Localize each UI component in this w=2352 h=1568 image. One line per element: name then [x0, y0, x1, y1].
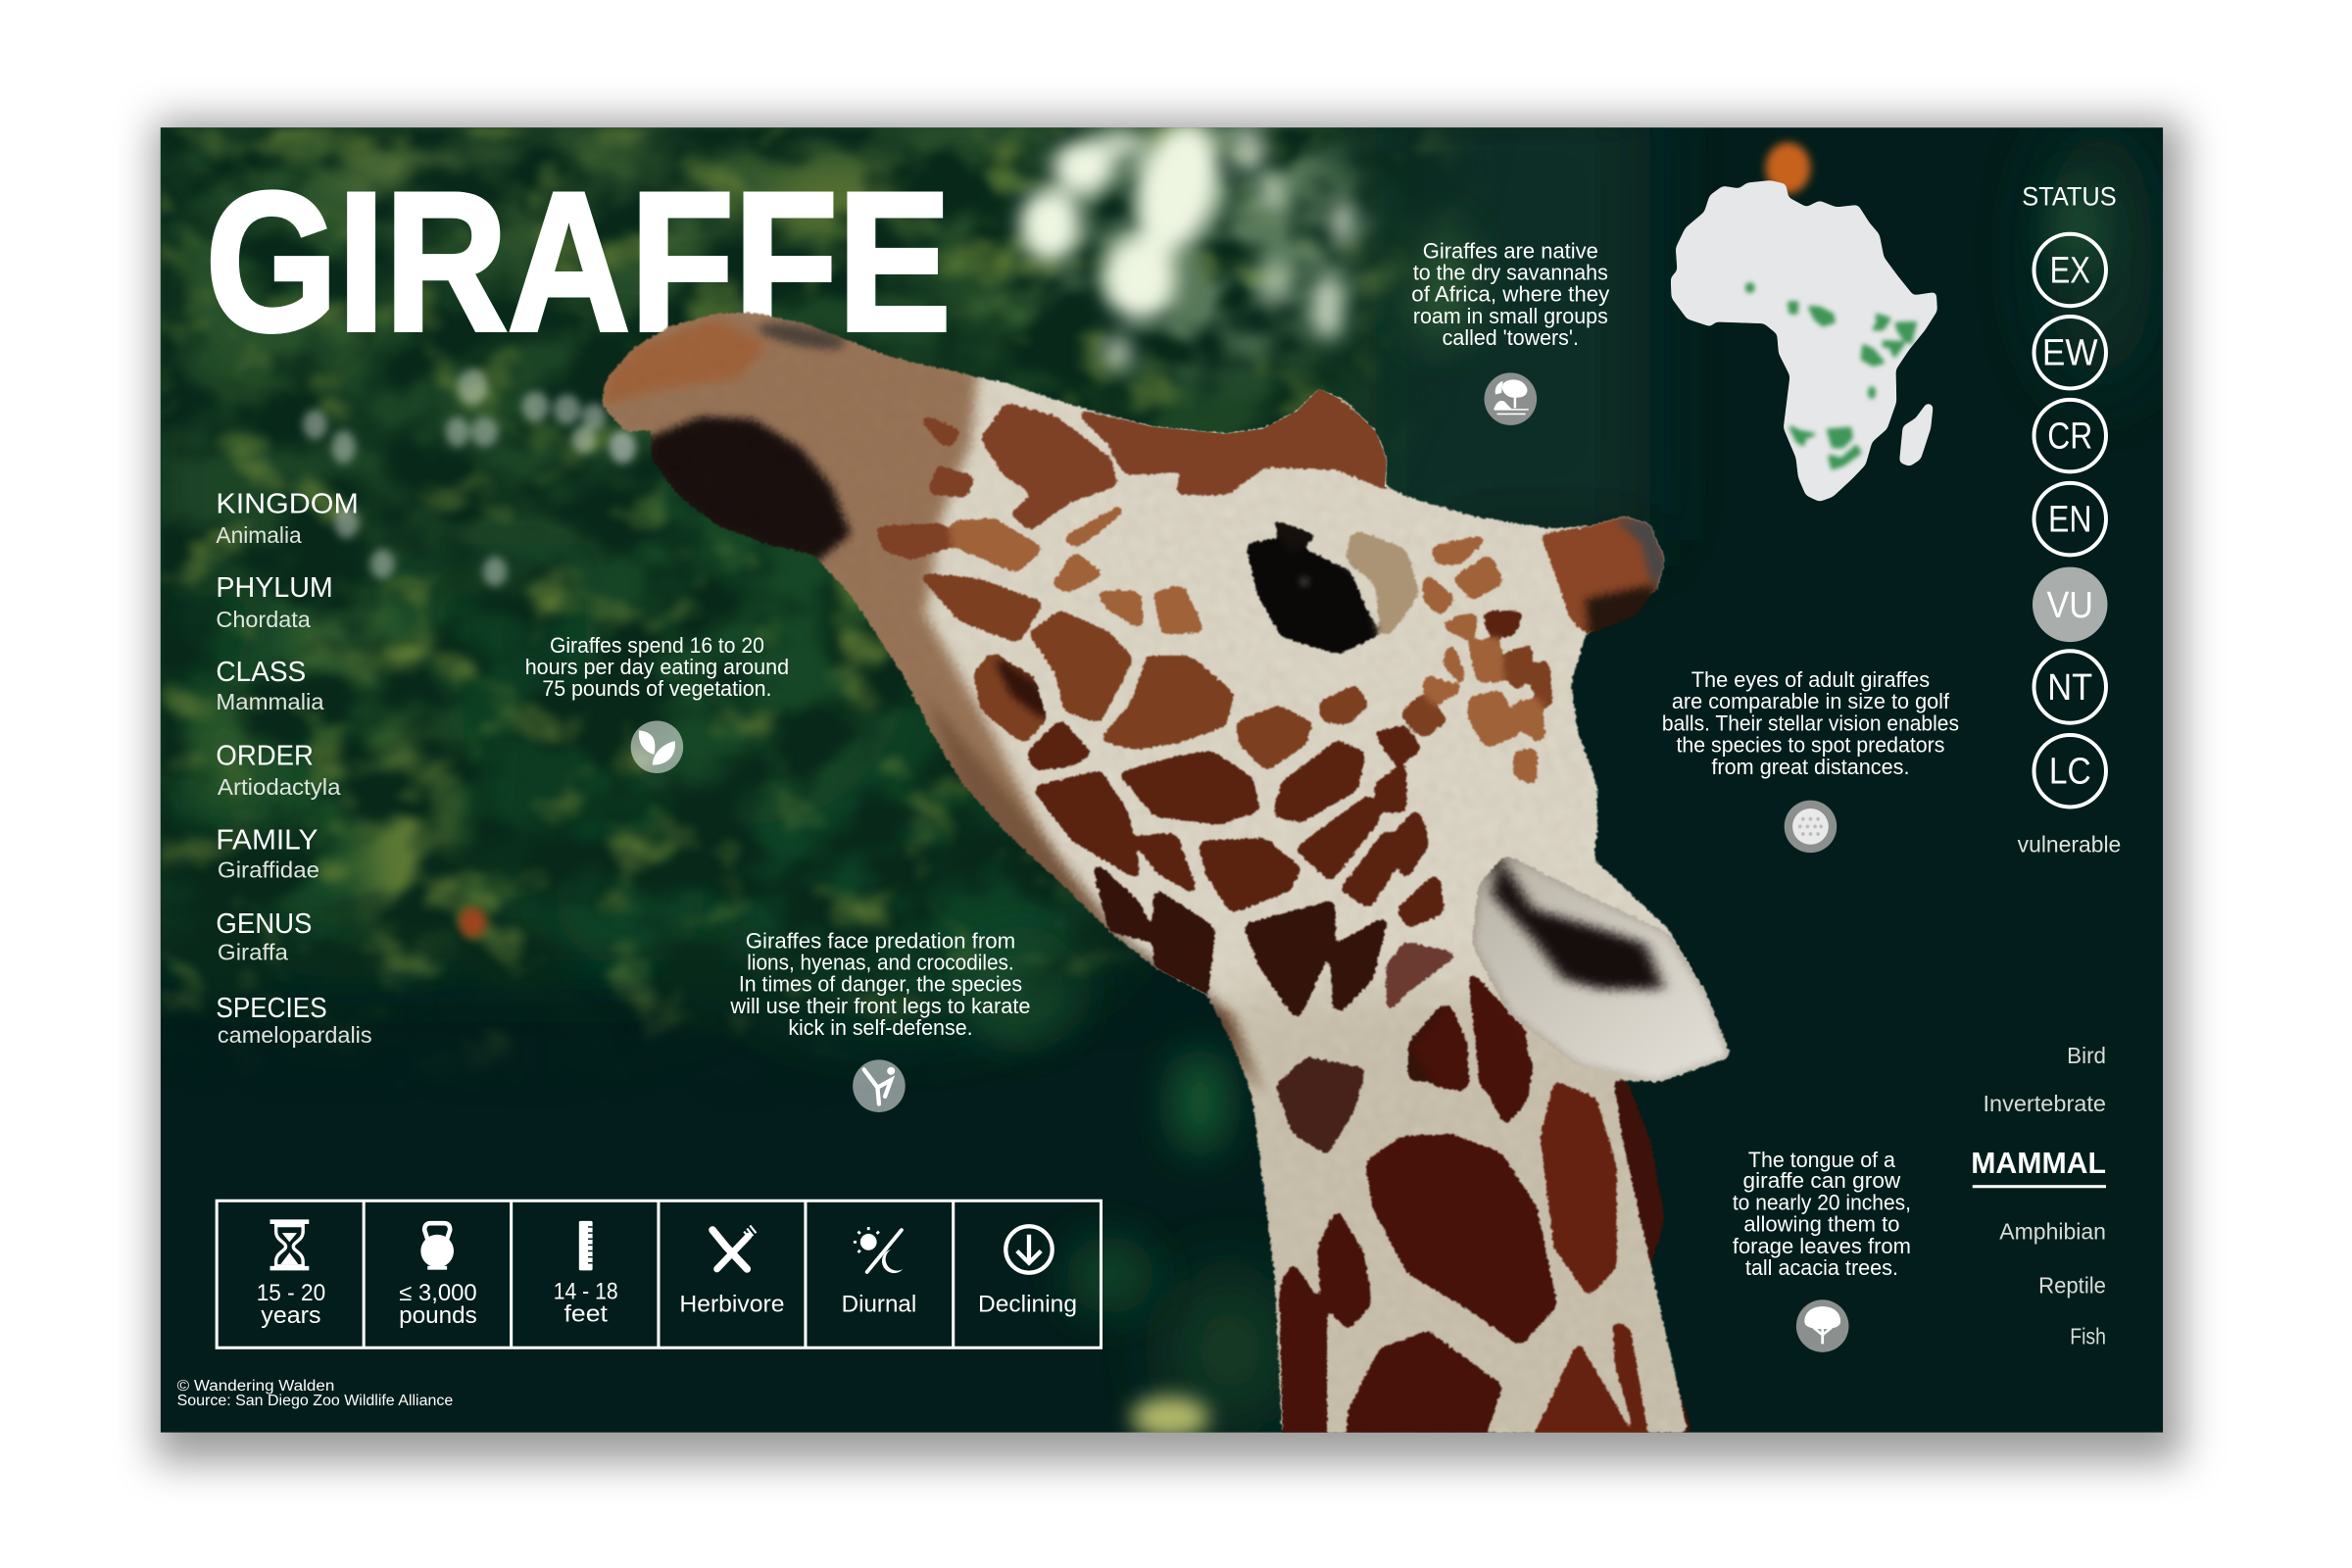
taxonomy list: GENUS — [216, 908, 312, 940]
fact: eyes: balls. Their stellar vision enables — [1662, 710, 1959, 735]
animal class list: Reptile — [2038, 1272, 2106, 1298]
fact: tongue — [1733, 1148, 1911, 1280]
stat: diet — [679, 1226, 785, 1318]
taxonomy list: FAMILY — [216, 824, 318, 856]
stat: trend — [978, 1226, 1077, 1318]
fact: habitat: roam in small groups — [1413, 304, 1608, 328]
animal class list: MAMMAL — [1971, 1147, 2106, 1180]
taxonomy list: CLASS — [216, 657, 306, 688]
animal class list: Fish — [2070, 1323, 2106, 1348]
fact: eyes: the species to spot predators — [1676, 733, 1944, 758]
stat: weight: pounds — [399, 1303, 477, 1329]
stat: height: 14 - 18 — [554, 1280, 618, 1305]
status NT: NT — [2047, 666, 2092, 709]
panel shadow — [155, 120, 2182, 1462]
title: GIRAFFE — [206, 151, 951, 372]
icon: savannah — [1485, 372, 1537, 425]
stat: weight: ≤ 3,000 — [399, 1281, 477, 1306]
fact: habitat: of Africa, where they — [1411, 282, 1610, 307]
giraffe ear — [1473, 857, 1730, 1082]
status VU selected — [2033, 567, 2108, 642]
giraffe patches — [880, 389, 1650, 1451]
fact: tongue: tall acacia trees. — [1745, 1255, 1898, 1280]
giraffe right horn — [1541, 516, 1664, 634]
stat: lifespan — [257, 1222, 325, 1329]
taxonomy list: SPECIES — [216, 993, 327, 1024]
fact: habitat — [1411, 238, 1610, 350]
credit: Source: San Diego Zoo Wildlife Alliance — [177, 1393, 453, 1409]
photo background — [135, 90, 2163, 1439]
taxonomy list: PHYLUM — [216, 572, 333, 604]
giraffe mane — [1613, 1078, 1691, 1433]
status LC: LC — [2049, 751, 2091, 793]
conservation status — [2018, 182, 2121, 857]
taxonomy list: camelopardalis — [218, 1022, 372, 1048]
icon: karate kick — [853, 1059, 906, 1112]
fact: eyes — [1662, 667, 1959, 779]
map: Africa range — [1673, 182, 1936, 500]
status LC — [2034, 735, 2106, 807]
fact: eyes: The eyes of adult giraffes — [1691, 667, 1930, 692]
leaf mottling — [161, 127, 1450, 1057]
fact: eyes: are comparable in size to golf — [1672, 689, 1950, 713]
fact: predators: Giraffes face predation from — [746, 928, 1015, 953]
animal class list: Bird — [2067, 1043, 2106, 1068]
fact: habitat: Giraffes are native — [1423, 238, 1598, 263]
giraffe range — [1747, 284, 1915, 467]
conservation status: STATUS — [2022, 182, 2117, 212]
taxonomy list: Artiodactyla — [218, 774, 341, 800]
stat: activity: Diurnal — [842, 1293, 916, 1318]
stat: height — [554, 1221, 618, 1327]
status EX — [2034, 234, 2106, 306]
fact: habitat: to the dry savannahs — [1413, 260, 1608, 284]
fact: predators: lions, hyenas, and crocodiles. — [747, 951, 1014, 975]
stat: weight — [399, 1223, 477, 1329]
giraffe head and neck base — [602, 311, 1729, 1433]
stat: activity — [842, 1227, 916, 1318]
status CR — [2034, 400, 2106, 471]
taxonomy list — [216, 488, 372, 1048]
taxonomy list: Animalia — [216, 522, 302, 548]
taxonomy list: Giraffa — [218, 940, 288, 965]
animal class list: Invertebrate — [1983, 1091, 2106, 1116]
fact: predators — [729, 928, 1031, 1040]
taxonomy list: Mammalia — [216, 689, 324, 714]
fact: tongue: giraffe can grow — [1743, 1168, 1901, 1193]
giraffe eye — [1251, 519, 1419, 650]
stat: lifespan: years — [261, 1303, 321, 1329]
status EX: EX — [2050, 250, 2090, 292]
stat: diet: Herbivore — [679, 1293, 785, 1318]
status NT — [2034, 651, 2106, 723]
stat: height: feet — [564, 1301, 608, 1327]
fact: eyes: from great distances. — [1711, 755, 1909, 779]
taxonomy list: ORDER — [216, 741, 314, 772]
status EW — [2034, 317, 2106, 388]
taxonomy list: Chordata — [216, 607, 311, 632]
fact: habitat: called 'towers'. — [1443, 325, 1579, 350]
fact: eating: Giraffes spend 16 to 20 — [550, 633, 764, 658]
stat: trend: Declining — [978, 1293, 1077, 1318]
fact: tongue: to nearly 20 inches, — [1733, 1190, 1911, 1214]
status EN — [2034, 483, 2106, 555]
fur texture — [604, 314, 1688, 1433]
status EN: EN — [2048, 499, 2091, 541]
taxonomy list: Giraffidae — [218, 857, 319, 882]
stat table — [217, 1200, 1101, 1348]
conservation status: vulnerable — [2018, 831, 2121, 857]
animal class list — [1971, 1043, 2106, 1348]
animal class list: Amphibian — [1999, 1218, 2106, 1244]
fact: eating: hours per day eating around — [525, 655, 789, 679]
fact: predators: will use their front legs to karate — [729, 994, 1031, 1018]
icon: leaves — [631, 720, 683, 773]
giraffe — [602, 311, 1731, 1433]
icon: golf ball — [1785, 801, 1837, 853]
fact: tongue: forage leaves from — [1733, 1234, 1911, 1258]
fact: tongue: The tongue of a — [1748, 1148, 1896, 1172]
Africa continent — [1673, 182, 1936, 500]
fact: eating: 75 pounds of vegetation. — [542, 676, 772, 701]
taxonomy list: KINGDOM — [216, 488, 359, 519]
fact: eating — [525, 633, 789, 701]
fact: tongue: allowing them to — [1743, 1212, 1900, 1237]
icon: acacia tree — [1796, 1299, 1848, 1352]
fact: predators: In times of danger, the species — [739, 972, 1022, 997]
credit: © Wandering Walden — [177, 1378, 334, 1395]
status CR: CR — [2047, 416, 2092, 458]
status EW: EW — [2042, 332, 2098, 374]
fact: predators: kick in self-defense. — [788, 1015, 973, 1040]
credit — [177, 1378, 453, 1409]
status VU selected: VU — [2047, 584, 2093, 626]
stat: lifespan: 15 - 20 — [257, 1281, 325, 1306]
